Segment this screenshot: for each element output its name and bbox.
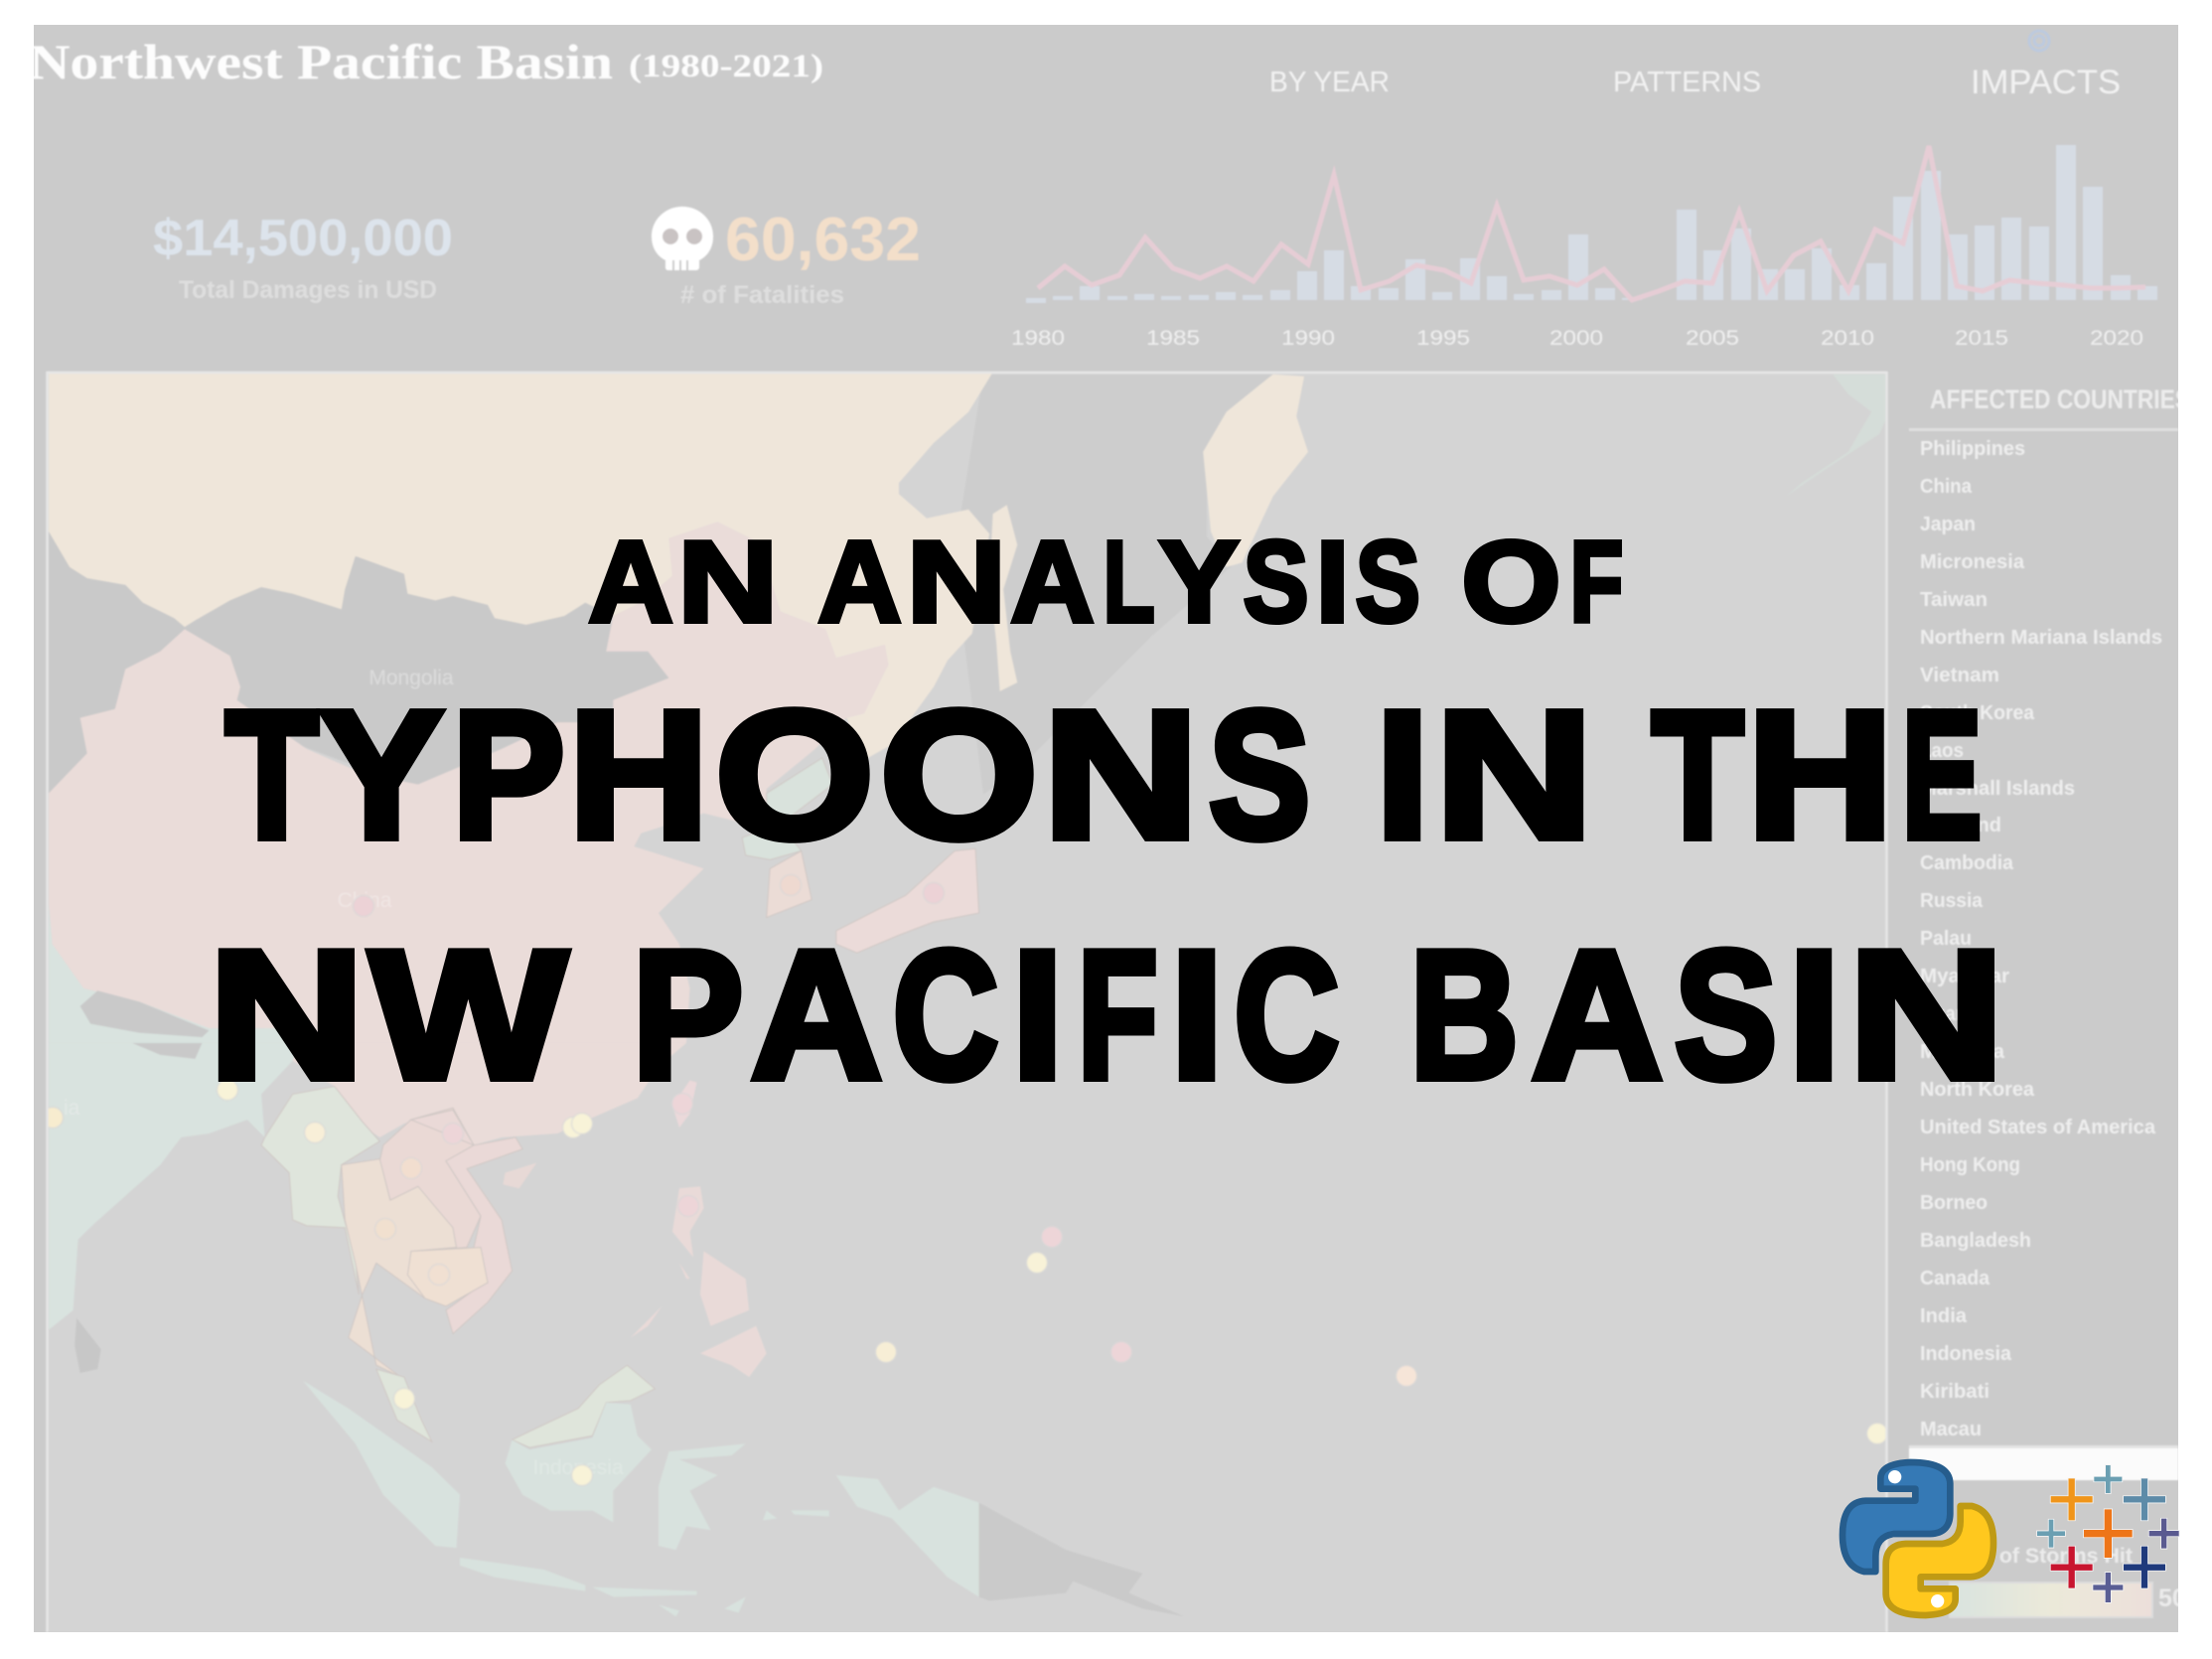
navigation tabs: BY YEAR (1269, 67, 1390, 98)
Kamchatka (1203, 375, 1308, 567)
year axis: 1995 (1416, 327, 1470, 350)
map frame (48, 373, 1887, 1632)
Russia (49, 372, 993, 760)
map labels: Mongolia (369, 667, 454, 689)
Hainan (503, 1163, 536, 1188)
Indonesia (303, 1381, 979, 1616)
country list: Japan (1920, 514, 1976, 535)
country list: Canada (1920, 1268, 1991, 1289)
map labels: China (338, 889, 392, 912)
China south (293, 1043, 686, 1145)
title line 3: C (893, 912, 998, 1117)
country list: Cambodia (1920, 852, 2014, 874)
title line 1: L (1104, 517, 1155, 646)
year axis: 2010 (1821, 327, 1874, 350)
Myanmar (261, 1086, 379, 1294)
country list: North Korea (1920, 1079, 2035, 1101)
title line 3: A (1532, 912, 1663, 1117)
China north (49, 522, 888, 1043)
country list: Hong Kong (1920, 1154, 2020, 1176)
stat: total damages: $14,500,000 (153, 210, 453, 267)
Taiwan (672, 1081, 697, 1128)
stat: fatalities: # of Fatalities (680, 281, 844, 309)
country list: Bangladesh (1920, 1230, 2031, 1252)
title line 3: C (1234, 912, 1339, 1117)
navigation tabs: IMPACTS (1971, 64, 2121, 101)
country list: Northern Mariana Islands (1920, 627, 2162, 649)
Philippines (631, 1186, 767, 1377)
title line 2: P (452, 673, 565, 876)
panel: map (42, 372, 1887, 1632)
country list: Palau (1920, 928, 1972, 950)
chart: yearly storms and fatalities (1011, 145, 2157, 350)
sea of Okhotsk shading (954, 375, 1276, 795)
stat: fatalities: 60,632 (725, 206, 921, 274)
country list: Guam (1920, 1003, 1972, 1025)
title line 1: A (818, 517, 902, 646)
Cambodia (407, 1248, 488, 1306)
country list: Taiwan (1920, 589, 1988, 611)
country list: India (1920, 1305, 1968, 1327)
legend: storms hit (1950, 1545, 2186, 1617)
title line 1: F (1569, 517, 1623, 646)
title line 3: S (1675, 912, 1777, 1117)
title line 3: F (1078, 912, 1158, 1117)
country list: China (1920, 476, 1973, 498)
Papua New Guinea (979, 1503, 1185, 1616)
title line 3: I (1170, 912, 1224, 1117)
country list: United States of America (1920, 1117, 2156, 1138)
title line 1: S (1356, 517, 1420, 646)
title line 3: I (1788, 912, 1841, 1117)
navigation tabs (1271, 70, 2120, 94)
Sakhalin (989, 505, 1017, 691)
legend: storms hit: # of Storms Hit (1982, 1545, 2133, 1568)
country list: Myanmar (1920, 966, 2009, 987)
country list: Micronesia (1920, 551, 2025, 573)
title line 2: O (715, 673, 874, 876)
map labels: ia (64, 1097, 80, 1120)
country list: Kiribati (1920, 1381, 1990, 1403)
map labels (64, 667, 624, 1479)
country list: South Korea (1920, 702, 2035, 724)
South Korea (767, 851, 811, 918)
country list: Marshall Islands (1920, 778, 2075, 800)
title line 3: W (369, 912, 567, 1117)
title line 1: S (1244, 517, 1309, 646)
country list: Macau (1920, 1419, 1982, 1440)
Malaysia (376, 1365, 655, 1447)
Thailand (342, 1159, 456, 1377)
stat: fatalities (681, 217, 919, 303)
title line 1: A (1011, 517, 1095, 646)
icon: Tableau logo (2037, 1465, 2179, 1602)
title line 2: E (1902, 673, 1982, 876)
India south (49, 1043, 300, 1330)
panel: affected countries (1909, 384, 2190, 1617)
North Korea (742, 758, 832, 860)
Kamchatka and Aleutians (1203, 375, 1885, 567)
line (1038, 146, 2145, 300)
Vietnam (411, 1110, 522, 1334)
country list: Borneo (1920, 1192, 1988, 1214)
title line 3: B (1410, 912, 1519, 1117)
country list: Thailand (1920, 815, 2001, 836)
title line 2: N (1435, 673, 1593, 876)
title line 2: H (1747, 673, 1893, 876)
legend: storms hit: 50 (2158, 1584, 2186, 1612)
Sri Lanka (74, 1318, 101, 1373)
lower map: south-east Asia (49, 1043, 1185, 1616)
Laos (379, 1108, 481, 1252)
title line 1: Y (1159, 517, 1239, 646)
title line 3: P (632, 912, 743, 1117)
country list: Indonesia (1920, 1343, 2012, 1365)
title line 2: N (1043, 673, 1199, 876)
bars (1026, 145, 2157, 303)
title (209, 517, 2004, 1117)
country list (1920, 438, 2162, 1440)
Nepal (80, 990, 209, 1037)
title line 2: T (1652, 673, 1743, 876)
icon: spiral (2029, 31, 2049, 51)
title line 2: T (225, 673, 318, 876)
Nepal tail (132, 1043, 202, 1059)
title line 1: N (677, 517, 778, 646)
year axis: 2020 (2090, 327, 2143, 350)
icon: skull (652, 207, 713, 270)
year axis: 2005 (1686, 327, 1739, 350)
title line 1: A (588, 517, 673, 646)
title line 3: I (1011, 912, 1064, 1117)
country list: Russia (1920, 890, 1984, 912)
title line 3: N (209, 912, 365, 1117)
year axis: 1980 (1011, 327, 1065, 350)
upper map: north Asia (49, 372, 1017, 1043)
year axis: 1985 (1146, 327, 1200, 350)
India north (50, 918, 284, 1043)
title line 1: O (1462, 517, 1560, 646)
title line 3: N (1848, 912, 2004, 1117)
title line 2: S (1209, 673, 1310, 876)
icon: Python logo (1843, 1462, 1993, 1615)
country list: Philippines (1920, 438, 2025, 460)
title line 2: I (1376, 673, 1429, 876)
Aleutians (1836, 376, 1883, 451)
map labels: Indonesia (532, 1456, 624, 1479)
stat: total damages: Total Damages in USD (179, 276, 437, 304)
year axis: 2000 (1549, 327, 1603, 350)
map markers (42, 874, 1887, 1486)
title line 2: Y (320, 673, 443, 876)
country list: Laos (1920, 740, 1964, 762)
title line 3: A (751, 912, 882, 1117)
title line 1: N (907, 517, 1006, 646)
title line 2: H (568, 673, 709, 876)
country list: Vietnam (1920, 665, 1999, 686)
dashboard title: (1980-2021) (629, 49, 823, 84)
year axis (1013, 330, 2143, 346)
navigation tabs: PATTERNS (1613, 67, 1761, 98)
title line 1: I (1316, 517, 1349, 646)
dashboard title (34, 43, 822, 83)
year axis: 1990 (1281, 327, 1335, 350)
dashboard title: Northwest Pacific Basin (29, 34, 613, 89)
central Asia and Mongolia (49, 528, 697, 794)
year axis: 2015 (1955, 327, 2008, 350)
scrollbar strip (1909, 1445, 2178, 1480)
title line 2: O (880, 673, 1038, 876)
Japan (836, 848, 979, 953)
country list: Malaysia (1920, 1041, 2005, 1063)
stat: total damages (153, 210, 453, 304)
